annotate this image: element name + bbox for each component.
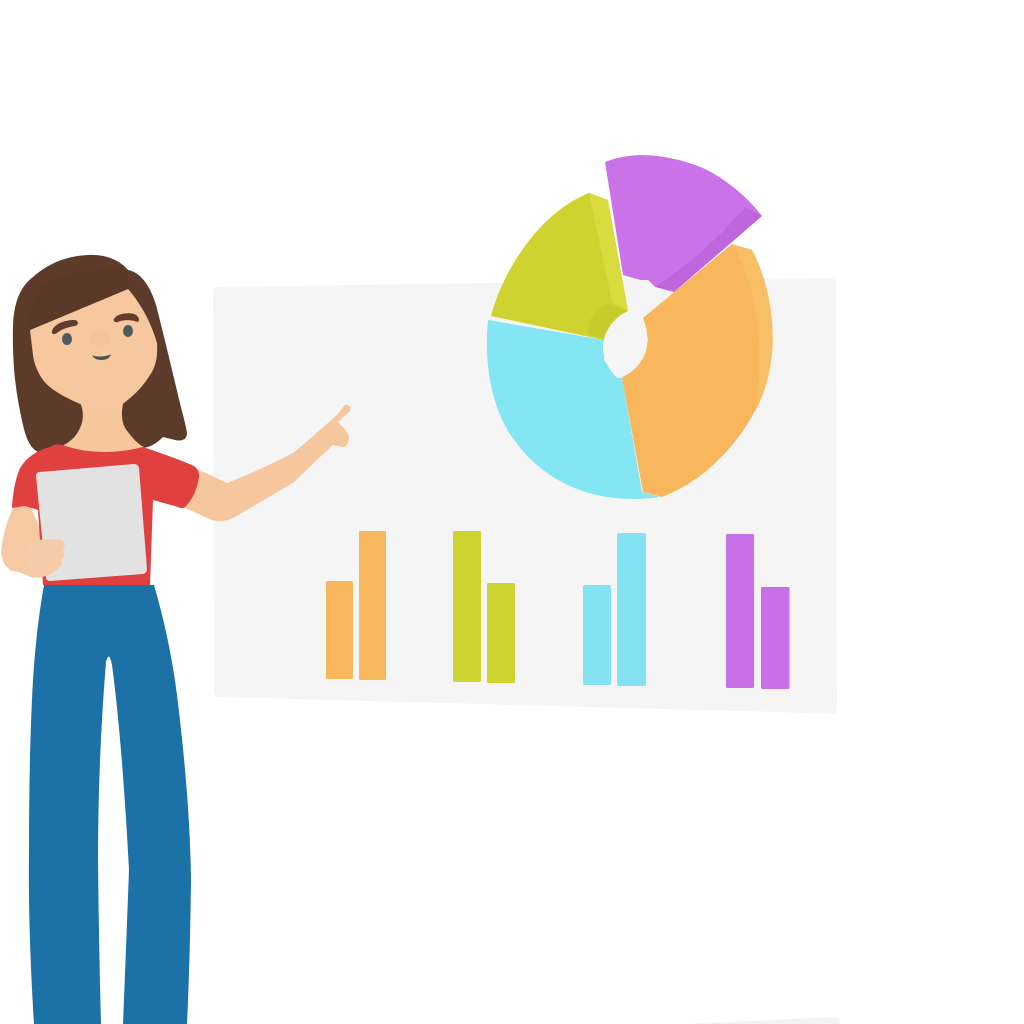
neck — [62, 400, 144, 454]
face — [30, 289, 157, 409]
person: presenter — [1, 255, 350, 1024]
mouth — [92, 354, 111, 360]
pie chart — [487, 155, 773, 499]
bar group: purple — [726, 534, 790, 689]
left eye — [62, 333, 72, 345]
slice: purple — [605, 155, 762, 292]
bar group: green — [453, 531, 515, 683]
panel: second board edge at bottom — [688, 1017, 840, 1024]
slice: green — [491, 193, 628, 340]
right eye — [123, 325, 133, 337]
slice: orange — [622, 244, 773, 497]
tablet — [36, 464, 147, 581]
slice highlight: orange rim — [732, 244, 773, 412]
chart centre hole — [603, 275, 674, 378]
nose — [90, 328, 110, 348]
t-shirt — [12, 444, 199, 585]
left eyebrow — [52, 320, 78, 334]
right eyebrow — [114, 313, 139, 322]
bar group: blue — [583, 533, 646, 686]
fringe — [30, 270, 128, 330]
jeans — [29, 585, 191, 1024]
right arm pointing — [185, 405, 350, 521]
panel: presentation board — [213, 278, 837, 714]
slice highlight: green rim — [589, 193, 628, 311]
slice shade: green hub — [588, 304, 628, 340]
bar chart — [326, 531, 790, 689]
slice shade: purple edge — [655, 207, 762, 292]
left arm and hand — [1, 505, 65, 578]
hand fingers on tablet — [25, 539, 65, 577]
hair back — [13, 255, 187, 452]
slice: blue — [487, 320, 660, 499]
bar group: orange — [326, 531, 386, 680]
